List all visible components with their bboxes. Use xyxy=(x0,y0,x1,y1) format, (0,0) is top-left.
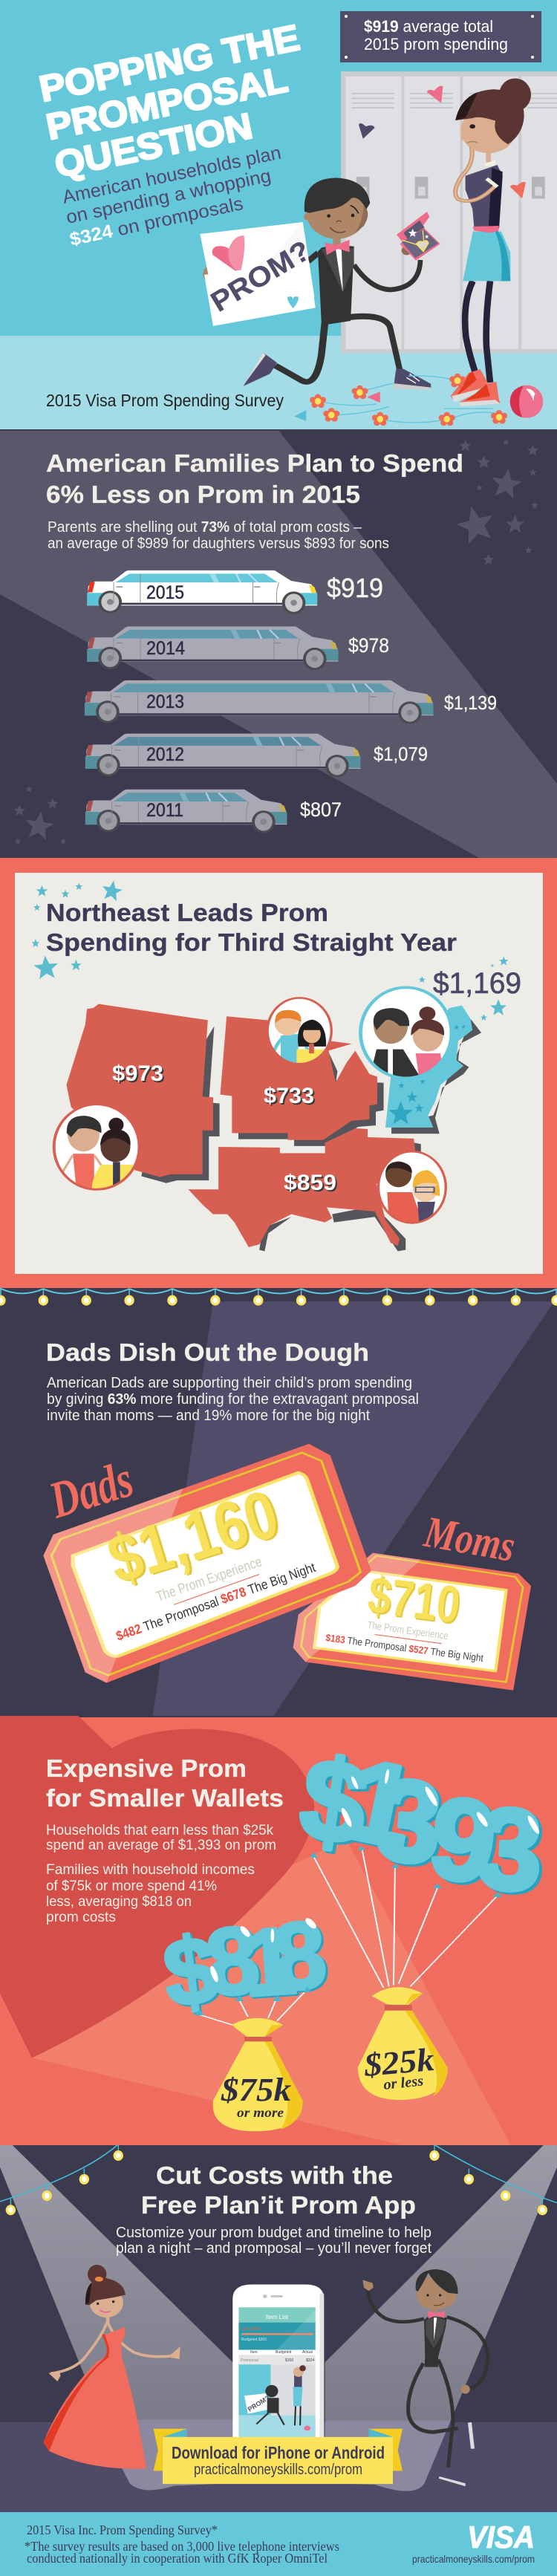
text block: survey source: *The survey results are based on 3,000 live telephone interviews xyxy=(25,2539,339,2554)
portrait: south couple xyxy=(378,1151,446,1223)
panel: prom app promo xyxy=(0,2145,557,2512)
text block: app description xyxy=(116,2225,431,2257)
regional values: $733 xyxy=(264,1084,314,1108)
illustration: phone with app: Actual xyxy=(302,2350,313,2355)
heading: Cut Costs with the xyxy=(156,2162,393,2189)
regional values: $973 xyxy=(112,1061,163,1086)
balloon number: 1393: 3 xyxy=(371,1754,446,1888)
title: QUESTION xyxy=(51,106,256,186)
decoration: string lights xyxy=(0,2145,557,2215)
map: midwest region xyxy=(221,1016,384,1146)
heading: Northeast Leads Prom xyxy=(46,899,328,926)
money bag: 75k or more: $75k xyxy=(221,2072,291,2108)
text block: survey source: 2015 Visa Inc. Prom Spending Survey* xyxy=(27,2523,218,2537)
limo chart: 2015: $919 xyxy=(327,573,383,603)
text block: dads funding: invite than moms — and 19% more for the big night xyxy=(47,1407,370,1424)
balloon number: 818 xyxy=(158,1901,330,2028)
banner: download: Download for iPhone or Android xyxy=(172,2443,385,2462)
heading: Free Plan’it Prom App xyxy=(141,2191,416,2219)
text block: household incomes: spend an average of $1,393 on prom xyxy=(46,1837,276,1853)
limo chart: 2012: 2012 xyxy=(146,744,184,765)
ticket: moms: The Prom Experience xyxy=(367,1619,449,1642)
regional values xyxy=(112,1061,336,1195)
illustration: phone with app xyxy=(232,2285,324,2438)
plaque: average total spending: 2015 prom spending xyxy=(364,35,508,53)
text block: household incomes: Families with household incomes xyxy=(46,1861,255,1878)
limo chart: 2014 xyxy=(87,626,389,670)
banner: download xyxy=(154,2429,403,2484)
text block: household incomes: Households that earn less than $25k xyxy=(46,1822,273,1838)
illustration: girl in dress xyxy=(43,2265,180,2469)
balloon number: 818: 1 xyxy=(239,1907,299,2017)
text block: app description: plan a night – and promposal – you’ll never forget xyxy=(116,2240,431,2257)
regional values: $859 xyxy=(284,1171,336,1195)
illustration: phone with app: Promposal xyxy=(241,2358,258,2363)
heading: American Families Plan to Spend xyxy=(46,449,463,477)
text block: parents share: an average of $989 for daughters versus $893 for sons xyxy=(48,536,389,552)
limo chart: 2013: 2013 xyxy=(146,692,184,712)
subtitle: promposal spending: American households plan xyxy=(61,143,283,208)
text block: household incomes: prom costs xyxy=(46,1909,116,1925)
balloon number: 818: $ xyxy=(158,1916,224,2028)
illustration: phone with app: Spent $484 xyxy=(241,2327,261,2332)
heading xyxy=(46,899,457,956)
text block: parents share xyxy=(48,519,389,552)
footer link: practicalmoneyskills.com/prom xyxy=(412,2553,535,2565)
decoration: spotlights xyxy=(0,2145,557,2491)
text block: household incomes: less, averaging $818 on xyxy=(46,1893,192,1910)
panel: hero promposal scene xyxy=(0,0,557,431)
panel: dads versus moms tickets xyxy=(0,1288,557,1717)
text block: household incomes: of $75k or more spend 41% xyxy=(46,1878,217,1894)
ticket: dads: $482 The Promposal $678 The Big Night xyxy=(114,1560,317,1644)
portrait: midwest couple xyxy=(267,998,331,1066)
plaque: average total spending xyxy=(340,11,541,62)
balloon number: 818: 8 xyxy=(269,1901,330,2011)
sign text: PROM? xyxy=(206,235,316,319)
illustration: phone with app: Item xyxy=(250,2350,258,2355)
limo chart: 2011: 2011 xyxy=(146,800,183,821)
ticket: dads xyxy=(43,1444,371,1683)
illustration: phone with app: $324 xyxy=(306,2358,314,2363)
balloon strings xyxy=(197,1850,498,2025)
money bag: 25k or less xyxy=(358,1987,448,2100)
title: PROMPOSAL xyxy=(43,59,291,148)
balloon number: 1393: $ xyxy=(293,1733,374,1870)
northeast value: $1,169 xyxy=(433,967,521,1000)
limo chart: 2015 xyxy=(87,570,383,614)
illustration: dancing boy xyxy=(362,2269,488,2486)
heading: Dads Dish Out the Dough xyxy=(46,1339,369,1366)
text block: parents share: Parents are shelling out 73% of total prom costs – xyxy=(48,519,362,536)
subtitle: promposal spending: on spending a whopping xyxy=(65,165,273,228)
balloon number: 1393: 3 xyxy=(475,1783,545,1915)
text block: survey source: conducted nationally in cooperation with GfK Roper OmniTel xyxy=(27,2551,328,2566)
heading: Spending for Third Straight Year xyxy=(46,928,457,956)
text block: household incomes xyxy=(46,1822,276,1925)
limo chart: 2015: 2015 xyxy=(146,582,184,603)
heading: 6% Less on Prom in 2015 xyxy=(46,481,360,508)
ticket: moms xyxy=(293,1553,531,1691)
script label: moms: Moms xyxy=(420,1507,518,1571)
text block: dads funding: by giving 63% more funding for the extravagant promposal xyxy=(47,1391,419,1408)
heading xyxy=(46,1754,284,1812)
money bag: 75k or more: or more xyxy=(237,2105,284,2120)
illustration: phone with app: Budgeted $300 xyxy=(241,2338,267,2342)
subtitle: promposal spending: $324 on promposals xyxy=(68,193,245,250)
heading: Expensive Prom xyxy=(46,1754,247,1782)
portrait: northeast couple xyxy=(360,987,452,1078)
illustration: phone with app: $100 xyxy=(285,2358,293,2363)
decoration: cyan stars xyxy=(31,879,509,1021)
panel: family spending limos xyxy=(0,431,557,858)
limo chart: 2013: $1,139 xyxy=(444,692,497,714)
text block: survey source xyxy=(25,2523,339,2566)
map: west region xyxy=(66,1004,220,1183)
limo chart: 2012 xyxy=(85,734,428,777)
panel: footer xyxy=(0,2512,557,2576)
heading xyxy=(141,2162,416,2219)
script label: dads: Dads xyxy=(42,1451,140,1530)
icon: hearts on lockers xyxy=(359,85,526,198)
balloon number: 818: 8 xyxy=(202,1906,264,2017)
limo chart: 2011: $807 xyxy=(300,799,342,821)
ticket: moms: $710 xyxy=(365,1565,463,1634)
heading: for Smaller Wallets xyxy=(46,1784,284,1812)
heading xyxy=(46,449,463,508)
illustration: girl xyxy=(451,78,531,406)
text block: app description: Customize your prom budget and timeline to help xyxy=(116,2225,431,2241)
logo: Visa: VISA xyxy=(467,2520,535,2554)
decoration: heart xyxy=(0,1716,314,2058)
decoration: string lights xyxy=(0,1288,557,1306)
text block: dads funding: American Dads are supporting their child’s prom spending xyxy=(47,1374,412,1391)
map: south region xyxy=(188,1128,421,1252)
illustration: phone with app: PROM? xyxy=(247,2394,271,2413)
limo chart: 2011 xyxy=(85,790,342,833)
money bag: 25k or less: or less xyxy=(382,2072,424,2093)
title: POPPING THE xyxy=(36,18,303,110)
plaque: average total spending: $919 average total xyxy=(364,17,493,36)
map: northeast region xyxy=(385,1005,481,1133)
panel: regional spending map xyxy=(0,858,557,1288)
decoration: stars xyxy=(14,439,538,845)
text block: dads funding xyxy=(47,1374,419,1424)
balloon number: 1393 xyxy=(293,1733,545,1915)
portrait: west couple xyxy=(54,1105,139,1189)
money bag: 75k or more xyxy=(213,2018,303,2131)
limo chart: 2012: $1,079 xyxy=(374,743,428,765)
title xyxy=(35,18,319,186)
illustration: phone with app: Budgeted xyxy=(276,2350,292,2355)
subtitle: promposal spending xyxy=(61,143,283,250)
ticket: dads: The Prom Experience xyxy=(154,1554,264,1605)
icon: beach ball xyxy=(510,386,543,418)
panel: smaller wallets balloons xyxy=(0,1716,557,2147)
limo chart: 2014: $978 xyxy=(348,634,389,657)
decoration: flowers and petals on floor xyxy=(294,374,507,426)
illustration: boy with sign and necklace xyxy=(200,178,440,390)
ticket: dads: $1,160 xyxy=(100,1476,287,1598)
ticket: moms: $183 The Promposal $527 The Big Night xyxy=(325,1632,484,1664)
balloon number: 1393: 9 xyxy=(423,1772,504,1908)
limo chart: 2013 xyxy=(85,680,497,724)
balloon number: 1393: 1 xyxy=(336,1734,426,1873)
illustration: phone with app: Item List xyxy=(266,2314,289,2320)
lockers xyxy=(341,71,557,353)
caption: survey name: 2015 Visa Prom Spending Survey xyxy=(46,391,284,410)
banner: download: practicalmoneyskills.com/prom xyxy=(194,2462,362,2478)
limo chart: 2014: 2014 xyxy=(146,638,185,659)
money bag: 25k or less: $25k xyxy=(362,2041,436,2084)
